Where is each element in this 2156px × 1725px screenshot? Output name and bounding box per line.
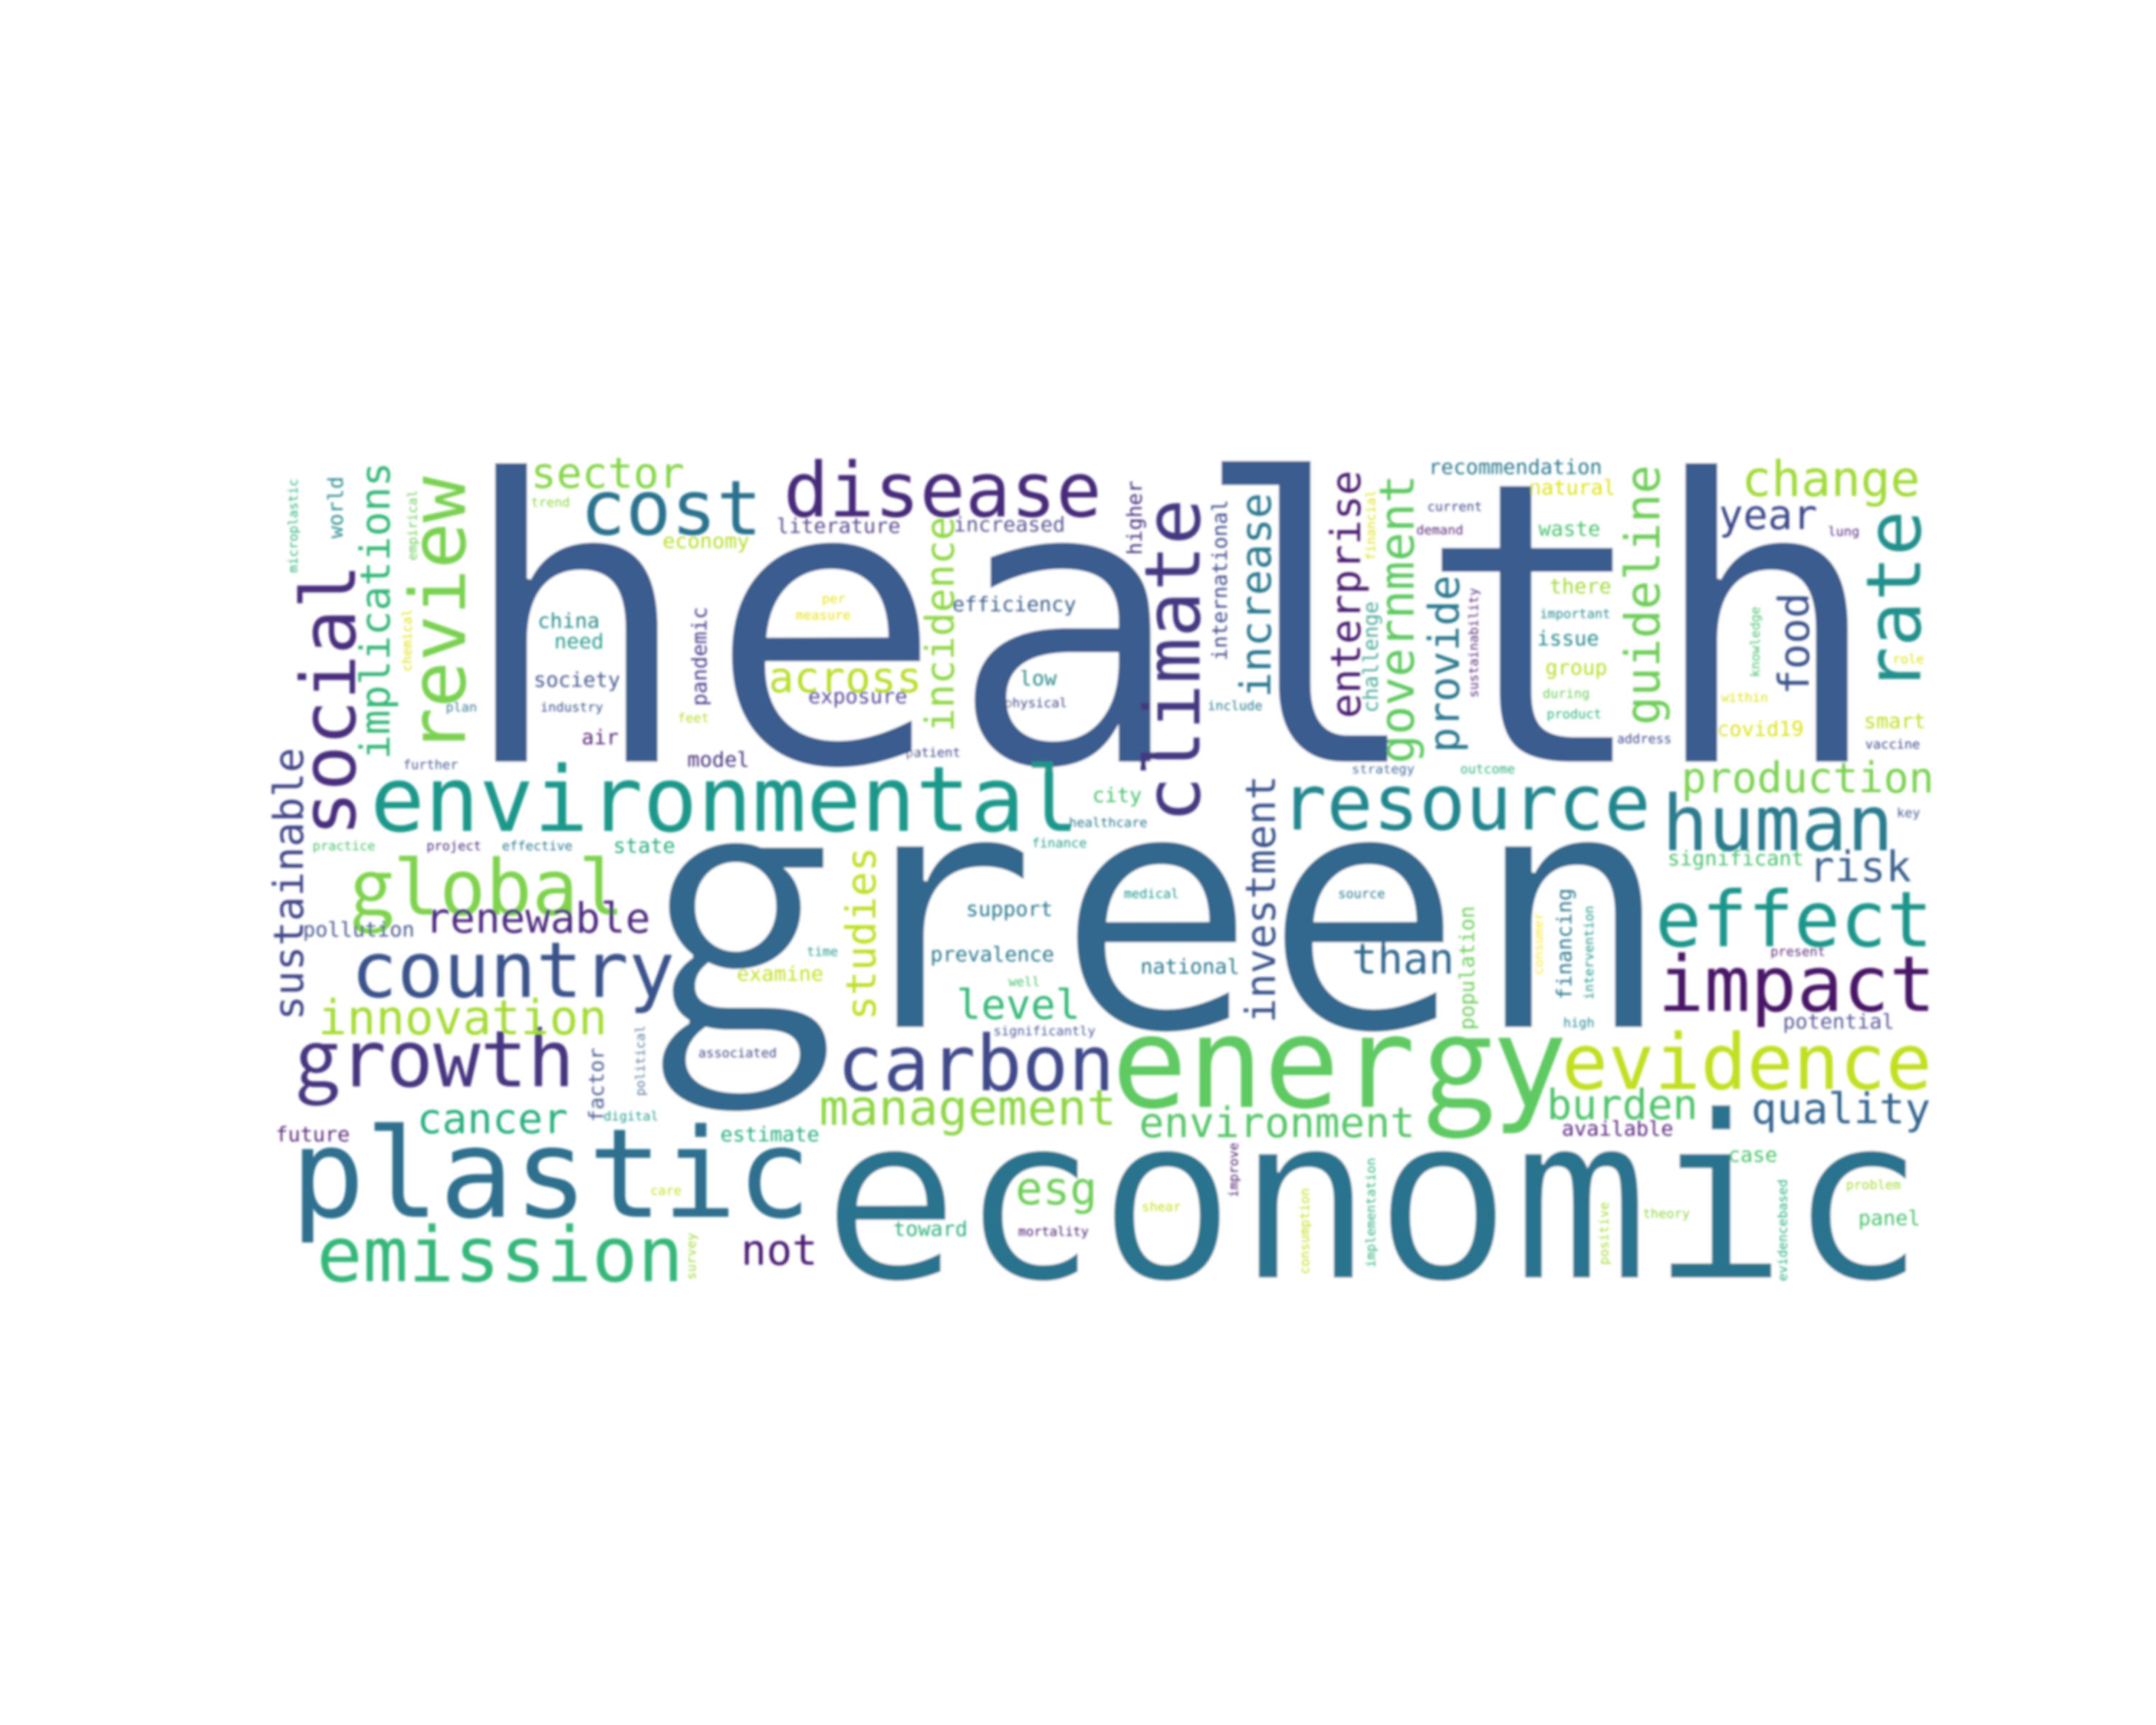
tiny horizontal words: include: [1207, 699, 1263, 714]
tiny vertical words: implementation: [1363, 1158, 1378, 1268]
tiny horizontal words: shear: [1142, 1200, 1181, 1215]
tiny horizontal words: feet: [678, 711, 709, 726]
small vertical words: [323, 477, 1577, 1122]
tiny horizontal words: mortality: [1018, 1225, 1089, 1240]
tiny horizontal words: healthcare: [1069, 815, 1148, 830]
small horizontal words: pollution: [303, 917, 415, 942]
small horizontal words: [275, 454, 1926, 1241]
tiny horizontal words: associated: [699, 1046, 777, 1061]
small horizontal words: city: [1092, 783, 1142, 807]
small horizontal words: prevalence: [931, 942, 1054, 967]
tiny horizontal words: per: [822, 592, 845, 607]
tiny horizontal words: important: [1540, 607, 1611, 622]
small horizontal words: potential: [1783, 1009, 1894, 1034]
tiny horizontal words: well: [1008, 975, 1040, 990]
word: global: g: [349, 826, 393, 937]
tiny horizontal words: measure: [796, 608, 851, 623]
word: risk: risk: [1809, 842, 1912, 892]
small vertical words: population: [1455, 906, 1479, 1030]
word: change: change: [1741, 451, 1920, 508]
word: growth: g: [295, 996, 338, 1109]
word: rate: rate: [1850, 510, 1938, 692]
tiny horizontal words: digital: [604, 1109, 658, 1124]
small horizontal words: group: [1545, 655, 1607, 679]
word: level: level: [957, 981, 1080, 1029]
tiny horizontal words: vaccine: [1865, 737, 1920, 752]
small horizontal words: society: [533, 667, 620, 691]
tiny vertical words: chemical: [400, 609, 415, 671]
tiny vertical words: microplastic: [286, 479, 301, 573]
small horizontal words: economy: [663, 529, 750, 553]
tiny vertical words: knowledge: [1748, 607, 1763, 677]
small horizontal words: need: [554, 629, 604, 653]
small horizontal words: air: [581, 725, 619, 750]
tiny vertical words: consumption: [1298, 1188, 1313, 1274]
tiny horizontal words: care: [650, 1183, 681, 1198]
word: country: country: [351, 926, 675, 1016]
word: cost: cost: [580, 464, 762, 552]
small horizontal words: increased: [954, 512, 1065, 537]
word: energy: ener: [1112, 990, 1416, 1137]
small vertical words: financing: [1552, 888, 1577, 1000]
small horizontal words: support: [966, 896, 1053, 921]
tiny horizontal words: outcome: [1460, 762, 1515, 777]
word: global: lobal: [393, 845, 625, 934]
small horizontal words: natural: [1529, 475, 1616, 500]
word: esg: esg: [1015, 1162, 1097, 1215]
word: emission: emission: [317, 1212, 683, 1300]
tiny horizontal words: finance: [1032, 836, 1087, 851]
word: across: across: [768, 653, 922, 702]
word: studies: studies: [837, 847, 885, 1021]
small horizontal words: state: [613, 834, 675, 858]
word: human: human: [1662, 780, 1894, 869]
word: provide: provide: [1420, 575, 1469, 753]
small horizontal words: estimate: [720, 1122, 819, 1146]
tiny horizontal words: current: [1427, 500, 1482, 515]
tiny horizontal words: theory: [1643, 1207, 1690, 1222]
word: guideline: guideline: [1615, 465, 1671, 725]
word: energy: g: [1422, 960, 1493, 1144]
small vertical words: factor: [584, 1048, 609, 1122]
word: renewable: renewable: [425, 893, 650, 942]
tiny vertical words: positive: [1597, 1202, 1612, 1265]
small horizontal words: panel: [1858, 1205, 1920, 1230]
word: effect: effect: [1655, 876, 1932, 965]
small horizontal words: issue: [1537, 626, 1599, 650]
small horizontal words: efficiency: [952, 592, 1077, 616]
tiny horizontal words: time: [807, 944, 838, 960]
word: implications: implications: [351, 462, 400, 760]
tiny horizontal words: plan: [446, 700, 477, 715]
tiny horizontal words: address: [1617, 732, 1672, 747]
word: burden: burden: [1547, 1080, 1698, 1129]
small vertical words: higher: [1123, 481, 1147, 555]
tiny vertical words: [286, 479, 1790, 1282]
small vertical words: international: [1207, 500, 1232, 661]
word: environmental: environmental: [370, 747, 1079, 852]
small horizontal words: model: [687, 747, 750, 771]
tiny vertical words: consumer: [1531, 912, 1546, 975]
small horizontal words: exposure: [808, 684, 907, 708]
word: food: food: [1769, 592, 1819, 695]
word: production: production: [1681, 754, 1934, 803]
small horizontal words: available: [1562, 1116, 1673, 1141]
tiny horizontal words: product: [1547, 707, 1602, 722]
tiny horizontal words: present: [1771, 944, 1825, 960]
small horizontal words: literature: [777, 514, 900, 538]
tiny horizontal words: high: [1563, 1016, 1595, 1031]
word: sustainable: sustainable: [265, 748, 313, 1021]
tiny horizontal words: key: [1897, 806, 1920, 821]
tiny horizontal words: demand: [1416, 523, 1463, 538]
word: economic: economic: [822, 1067, 1926, 1333]
word: resource: resource: [1281, 759, 1651, 848]
word: government: government: [1369, 474, 1425, 763]
word: green: g: [643, 638, 833, 1126]
small horizontal words: case: [1728, 1142, 1777, 1167]
tiny vertical words: financial: [1363, 490, 1378, 561]
word: evidence: evidence: [1562, 1018, 1932, 1108]
word: green: reen: [836, 717, 1674, 1108]
tiny vertical words: intervention: [1582, 906, 1597, 1000]
tiny horizontal words: effective: [502, 839, 573, 854]
word: review: review: [395, 476, 484, 754]
word: not: not: [741, 1225, 818, 1275]
tiny horizontal words: practice: [313, 839, 375, 854]
tiny vertical words: improve: [1226, 1143, 1241, 1197]
small horizontal words: examine: [737, 961, 824, 985]
tiny horizontal words: project: [426, 839, 482, 854]
word: disease: disease: [783, 446, 1102, 535]
word: than: than: [1352, 934, 1455, 984]
tiny horizontal words: trend: [531, 495, 570, 510]
word: carbon: carbon: [837, 1020, 1115, 1109]
tiny horizontal words: source: [1338, 887, 1385, 902]
word: cancer: cancer: [417, 1094, 568, 1143]
small horizontal words: covid19: [1717, 717, 1804, 741]
word: increase: increase: [1231, 493, 1281, 698]
small horizontal words: smart: [1864, 709, 1926, 733]
small horizontal words: toward: [893, 1217, 967, 1241]
word: incidence: incidence: [918, 516, 964, 732]
word: plastic: plastic: [290, 1102, 811, 1246]
word: social: social: [285, 564, 373, 837]
tiny vertical words: survey: [684, 1233, 699, 1280]
word: environment: environment: [1139, 1098, 1415, 1147]
tiny horizontal words: strategy: [1352, 762, 1414, 777]
word: health: health: [456, 394, 1885, 857]
tiny horizontal words: further: [403, 758, 458, 773]
tiny horizontal words: industry: [540, 700, 603, 715]
word: sector: sector: [531, 448, 685, 498]
small horizontal words: low: [1020, 666, 1057, 691]
small horizontal words: china: [538, 608, 599, 632]
tiny horizontal words: problem: [1846, 1178, 1901, 1193]
tiny horizontal words: significantly: [993, 1024, 1095, 1039]
word: enterprise: enterprise: [1322, 470, 1370, 718]
tiny horizontal words: physical: [1005, 696, 1067, 711]
small vertical words: pandemic: [687, 607, 711, 706]
tiny vertical words: evidencebased: [1775, 1179, 1790, 1282]
small horizontal words: recommendation: [1429, 454, 1602, 479]
small horizontal words: future: [275, 1122, 350, 1146]
tiny vertical words: sustainability: [1467, 588, 1482, 698]
small vertical words: challenge: [1358, 602, 1383, 713]
tiny vertical words: political: [633, 1026, 648, 1096]
word: impact: impact: [1658, 940, 1935, 1029]
tiny horizontal words: lung: [1828, 524, 1859, 539]
small vertical words: world: [323, 477, 348, 538]
tiny vertical words: empirical: [405, 490, 420, 561]
small horizontal words: there: [1549, 574, 1611, 599]
tiny horizontal words: during: [1542, 686, 1590, 702]
word: energy: y: [1492, 990, 1568, 1137]
tiny horizontal words: medical: [1124, 887, 1179, 902]
word: innovation: innovation: [318, 990, 607, 1046]
tiny horizontal words: within: [1721, 691, 1768, 706]
word: quality: quality: [1751, 1084, 1930, 1133]
small horizontal words: waste: [1539, 516, 1600, 540]
word: management: management: [819, 1080, 1117, 1137]
word: year: year: [1718, 491, 1818, 539]
small horizontal words: national: [1141, 954, 1240, 979]
tiny horizontal words: [313, 495, 1924, 1240]
word: climate: climate: [1129, 499, 1218, 823]
tiny horizontal words: patient: [906, 745, 961, 760]
word: growth: rowth: [339, 1013, 575, 1105]
small horizontal words: significant: [1667, 846, 1804, 870]
tiny horizontal words: role: [1893, 652, 1924, 667]
word: investment: investment: [1237, 776, 1285, 1023]
